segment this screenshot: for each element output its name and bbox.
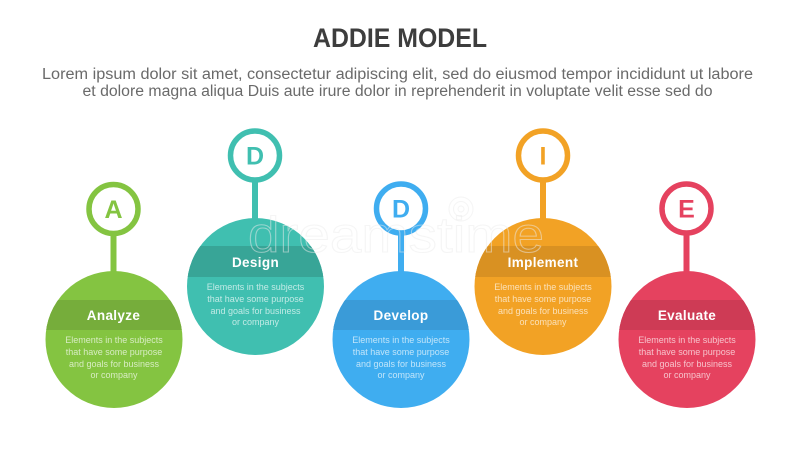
- panel: Develop: [326, 184, 476, 408]
- letter badge: D: D: [246, 142, 264, 170]
- letter badge: A: A: [104, 196, 123, 224]
- description: Evaluate: that have some purpose: [639, 347, 735, 357]
- panel: Design: [180, 131, 330, 355]
- heading band: Implement: [468, 246, 618, 277]
- description: Analyze: [65, 335, 163, 380]
- heading band: Evaluate: [612, 300, 762, 330]
- subtitle: et dolore magna aliqua Duis aute irure dolor in reprehenderit in voluptate velit esse sed do: [82, 83, 712, 100]
- connector stem: Evaluate: [684, 234, 690, 274]
- description: Develop: or company: [377, 370, 425, 380]
- connector stem: Implement: [540, 181, 546, 221]
- description: Design: [207, 282, 305, 327]
- heading band: Analyze: [40, 300, 190, 330]
- letter badge: D: D: [392, 196, 410, 224]
- description: Implement: that have some purpose: [495, 294, 591, 304]
- description: Implement: or company: [519, 317, 567, 327]
- heading: Design: Design: [232, 255, 279, 270]
- description: Evaluate: [638, 335, 736, 380]
- description: Evaluate: and goals for business: [642, 359, 733, 369]
- letter badge: D: [230, 131, 280, 180]
- subtitle: [42, 66, 753, 100]
- description: Develop: and goals for business: [356, 359, 447, 369]
- heading: Analyze: Analyze: [87, 308, 140, 323]
- letter badge: I: [518, 131, 568, 180]
- description: Analyze: and goals for business: [69, 359, 160, 369]
- subtitle: Lorem ipsum dolor sit amet, consectetur adipiscing elit, sed do eiusmod tempor incididunt ut labore: [42, 66, 753, 83]
- description: Develop: that have some purpose: [353, 347, 449, 357]
- circle body: Develop: [332, 271, 470, 408]
- panel: Analyze: [40, 184, 190, 408]
- description: Develop: Elements in the subjects: [352, 335, 450, 345]
- circle body: Evaluate: [618, 271, 756, 408]
- circle body: Analyze: [46, 271, 182, 408]
- letter badge: D: [376, 184, 426, 233]
- description: Analyze: or company: [90, 370, 138, 380]
- description: Design: or company: [232, 317, 280, 327]
- panel: Implement: [468, 131, 618, 355]
- letter badge: E: [662, 184, 711, 233]
- panel: Evaluate: [612, 184, 762, 408]
- description: Develop: [352, 335, 450, 380]
- circle body: Design: [187, 218, 324, 355]
- letter badge: I: I: [540, 142, 546, 170]
- description: Implement: and goals for business: [498, 306, 589, 316]
- title: ADDIE MODEL: [313, 23, 487, 53]
- circle body: Implement: [474, 218, 612, 355]
- description: Design: that have some purpose: [207, 294, 304, 304]
- description: Evaluate: or company: [663, 370, 711, 380]
- description: Design: Elements in the subjects: [207, 282, 305, 292]
- heading: Develop: Develop: [374, 308, 428, 323]
- letter badge: A: [89, 184, 138, 234]
- watermark: dreamstime: [248, 207, 544, 263]
- heading band: Design: [180, 246, 330, 277]
- letter badge: E: E: [678, 196, 695, 224]
- description: Analyze: that have some purpose: [66, 347, 162, 357]
- heading: Evaluate: Evaluate: [658, 308, 716, 323]
- connector stem: Analyze: [110, 234, 116, 274]
- description: Implement: Elements in the subjects: [494, 282, 592, 292]
- description: Analyze: Elements in the subjects: [65, 335, 163, 345]
- connector stem: Design: [252, 181, 258, 221]
- description: Design: and goals for business: [210, 306, 301, 316]
- description: Implement: [494, 282, 592, 327]
- heading band: Develop: [326, 300, 476, 330]
- heading: Implement: Implement: [508, 255, 578, 270]
- connector stem: Develop: [398, 234, 404, 274]
- description: Evaluate: Elements in the subjects: [638, 335, 736, 345]
